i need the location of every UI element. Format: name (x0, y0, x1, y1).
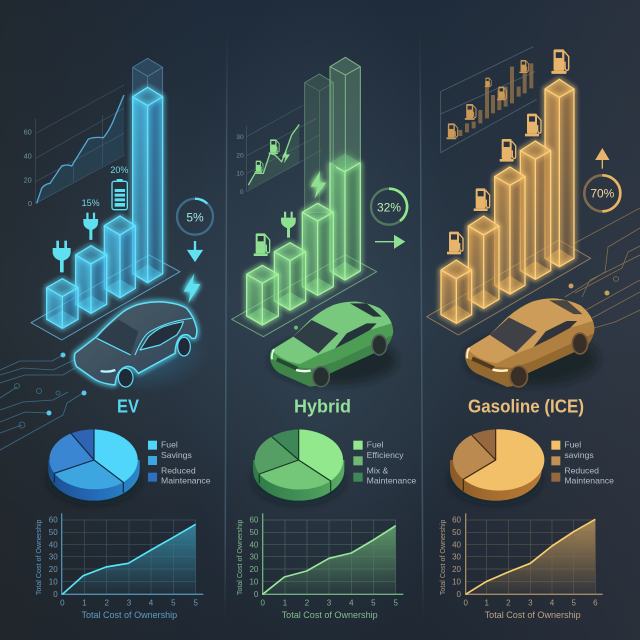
EV line chart: 0 (60, 598, 65, 607)
EV line chart: 10 (49, 578, 58, 587)
Gasoline line chart: 0 (457, 590, 462, 599)
Hybrid line chart: Total Cost of Ownership (235, 519, 244, 595)
column: Hybrid (232, 57, 407, 387)
Gasoline legend: Reduced (564, 465, 599, 475)
Hybrid line chart: 1 (283, 598, 288, 607)
Hybrid line chart: 60 (249, 516, 259, 525)
Hybrid car (270, 302, 397, 387)
Hybrid line chart: 40 (249, 540, 259, 549)
icon: bolt (311, 171, 326, 198)
Hybrid mini chart (236, 105, 322, 196)
EV mini line chart: 60 (24, 127, 32, 136)
EV legend: Reduced (161, 465, 196, 475)
Hybrid mini chart: 30 (236, 134, 244, 141)
EV line chart: 5 (171, 598, 176, 607)
Gasoline bar 2 (468, 216, 499, 308)
ring 70% (584, 175, 620, 211)
heading: Hybrid: Hybrid (294, 396, 351, 416)
Gasoline line chart: 60 (452, 516, 462, 525)
ring 32%: 32% (377, 200, 401, 214)
Gasoline line chart: 1 (484, 598, 489, 607)
panel: Hybrid lower (235, 429, 416, 620)
EV line chart: 5 (193, 598, 198, 607)
icon: pump 3 (500, 139, 516, 162)
icon: plug small (83, 213, 98, 240)
Hybrid legend (353, 440, 416, 485)
Hybrid legend: Maintenance (367, 475, 416, 485)
Gasoline legend: Maintenance (564, 475, 614, 485)
Hybrid line chart: 5 (371, 598, 376, 607)
arrow up (596, 149, 608, 169)
Gasoline line chart: 3 (528, 598, 533, 607)
Hybrid line chart: 3 (327, 598, 332, 607)
EV legend: Fuel (161, 440, 178, 450)
Hybrid bar 1 (247, 265, 278, 325)
EV legend: Maintenance (161, 475, 211, 485)
Hybrid line chart: 0 (260, 598, 265, 607)
Gasoline legend: savings (564, 450, 594, 460)
Hybrid bar 3 (302, 203, 333, 295)
Gasoline legend (551, 440, 614, 485)
Hybrid line chart: 10 (249, 578, 259, 587)
Gasoline line chart: 0 (463, 598, 468, 607)
Hybrid line chart: 20 (249, 565, 259, 574)
ring 5%: 5% (186, 210, 204, 224)
EV bar 1 (47, 279, 78, 328)
Hybrid line chart: 5 (393, 598, 398, 607)
Gasoline line chart: Total Cost of Ownership (485, 610, 581, 620)
EV line chart: 2 (104, 598, 109, 607)
EV line chart (34, 513, 203, 620)
Gasoline line chart: 50 (452, 528, 462, 537)
ring 32% (371, 189, 407, 225)
EV line chart: 4 (149, 598, 154, 607)
EV line chart: 3 (127, 598, 132, 607)
label 15%: 15% (82, 198, 100, 208)
Hybrid line chart: 2 (305, 598, 310, 607)
circuit lines: EV (0, 352, 86, 450)
panel: EV lower (34, 429, 211, 620)
Gasoline line chart: Total Cost of Ownership (438, 519, 447, 595)
icon: pump 2 (474, 188, 490, 211)
EV platform (31, 255, 180, 340)
EV mini line chart: 0 (28, 199, 32, 208)
Hybrid mini chart: 10 (236, 171, 244, 178)
EV bar 3 (104, 216, 135, 298)
EV bar 2 (76, 246, 107, 313)
Hybrid platform (232, 255, 377, 337)
EV line chart: 40 (49, 540, 58, 549)
icon: pump 1 (447, 232, 463, 254)
circuit lines: Gasoline (565, 208, 640, 328)
label 20%: 20% (110, 165, 128, 175)
Gasoline line chart: 10 (452, 578, 462, 587)
Gasoline pie (449, 429, 544, 505)
Gasoline line chart: 2 (506, 598, 511, 607)
icon: plug large (53, 241, 71, 272)
Hybrid line chart: Total Cost of Ownership (282, 610, 378, 620)
Gasoline line chart: 40 (452, 540, 462, 549)
Hybrid pie (252, 429, 345, 505)
EV line chart: 1 (82, 598, 87, 607)
Hybrid legend: Efficiency (367, 450, 404, 460)
icon: plug (281, 212, 296, 238)
Hybrid legend: Mix & (367, 465, 389, 475)
Hybrid mini chart: 0 (240, 189, 244, 196)
icon: battery (112, 179, 127, 210)
Hybrid bar 2 (274, 243, 306, 310)
Hybrid bar 4 (330, 57, 360, 280)
EV car (74, 302, 210, 393)
EV pie (47, 429, 141, 505)
Gasoline mini bar chart (441, 47, 537, 153)
Hybrid line chart: 0 (254, 590, 259, 599)
EV mini line chart (24, 85, 125, 208)
ring 5% (177, 199, 213, 235)
EV line chart: 20 (49, 565, 58, 574)
Gasoline bar 5 (545, 79, 574, 267)
Gasoline line chart: 30 (452, 553, 462, 562)
Hybrid ghost bar back (305, 74, 333, 212)
heading: Gasoline (ICE): Gasoline (ICE) (468, 396, 584, 416)
EV line chart: 0 (53, 590, 58, 599)
icon: pump 4 (525, 114, 541, 136)
EV legend (148, 440, 211, 485)
Gasoline line chart: 5 (571, 598, 576, 607)
heading: EV: EV (117, 396, 139, 416)
Gasoline bar 3 (495, 167, 525, 294)
EV bar 4 (133, 58, 163, 283)
arrow down (189, 241, 201, 260)
Hybrid mini chart: 20 (236, 152, 244, 159)
Hybrid line chart (235, 513, 403, 620)
Gasoline bar 4 (520, 141, 551, 279)
EV line chart: 60 (49, 516, 58, 525)
Gasoline line chart (438, 513, 603, 620)
column: Gasoline (427, 47, 620, 387)
EV line chart: 30 (49, 553, 58, 562)
Gasoline platform (427, 240, 591, 335)
icon: pump (254, 233, 270, 256)
ring 70%: 70% (590, 187, 615, 201)
Gasoline car (465, 298, 598, 387)
Gasoline bar 1 (441, 260, 472, 323)
EV mini line chart: 20 (24, 176, 32, 185)
Hybrid line chart: 30 (249, 553, 259, 562)
arrow right (375, 236, 404, 248)
Hybrid line chart: 4 (349, 598, 354, 607)
EV line chart: Total Cost of Ownership (81, 610, 177, 620)
Gasoline line chart: 6 (593, 598, 598, 607)
EV line chart: Total Cost of Ownership (34, 519, 43, 595)
Gasoline line chart: 20 (452, 565, 462, 574)
Hybrid line chart: 50 (249, 528, 259, 537)
column: EV (24, 58, 213, 393)
EV legend: Savings (161, 450, 192, 460)
panel: Gasoline lower (438, 429, 614, 620)
Gasoline line chart: 4 (550, 598, 555, 607)
icon: bolt (184, 273, 200, 303)
Gasoline legend: Fuel (564, 440, 581, 450)
EV line chart: 50 (49, 528, 58, 537)
EV mini line chart: 40 (24, 152, 32, 161)
Hybrid legend: Fuel (367, 440, 384, 450)
icon: pump 5 (551, 49, 569, 74)
